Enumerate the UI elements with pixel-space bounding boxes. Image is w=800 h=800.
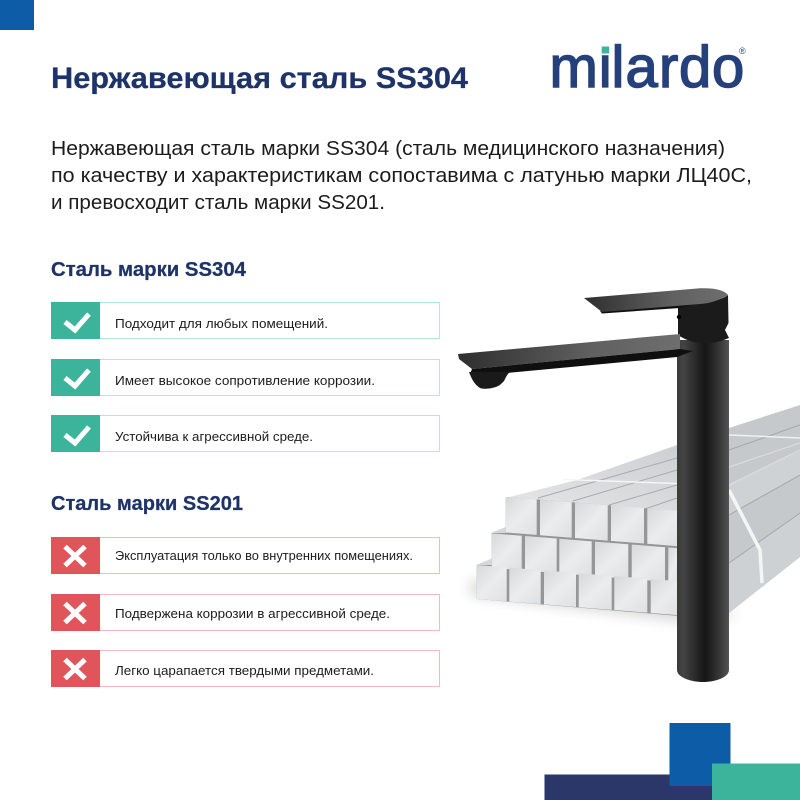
faucet aerator bbox=[469, 372, 510, 389]
heading: SS304: Сталь марки SS304 bbox=[51, 259, 247, 281]
row: corrosion resistance: Имеет высокое сопротивление коррозии. bbox=[115, 373, 375, 388]
top face bbox=[506, 445, 677, 512]
logo: milardo: ® bbox=[739, 46, 746, 56]
row: prone to corrosion bbox=[51, 594, 440, 631]
strap on side bbox=[729, 490, 762, 583]
row: aggressive environment bbox=[51, 415, 440, 452]
row: indoor only bbox=[51, 537, 440, 574]
faucet handle bbox=[584, 288, 728, 319]
middle row cells bbox=[492, 533, 680, 583]
panel: SS201 drawbacks bbox=[51, 537, 440, 687]
row: prone to corrosion: Подвержена коррозии в агрессивной среде. bbox=[115, 606, 390, 621]
bottom row cells bbox=[477, 565, 680, 615]
title: Нержавеющая сталь SS304 bbox=[51, 62, 468, 95]
row: aggressive environment: Устойчива к агрессивной среде. bbox=[115, 429, 313, 444]
intro text block bbox=[51, 137, 752, 214]
intro text block: и превосходит сталь марки SS201. bbox=[51, 191, 385, 214]
row: scratches easily bbox=[51, 650, 440, 687]
row: any rooms: Подходит для любых помещений. bbox=[115, 316, 328, 331]
decorative blocks: bottom right bbox=[544, 723, 800, 800]
intro text block: Нержавеющая сталь марки SS304 (сталь медицинского назначения) bbox=[51, 137, 725, 160]
panel: SS304 advantages bbox=[51, 302, 440, 452]
illustration: black faucet bbox=[458, 288, 729, 682]
corner square: top left bbox=[0, 0, 34, 30]
side of the stack bbox=[677, 405, 800, 616]
faucet body bbox=[677, 340, 729, 682]
faucet head bbox=[678, 295, 729, 344]
top row cells bbox=[506, 497, 680, 546]
intro text block: по качеству и характеристикам сопоставима с латунью марки ЛЦ40С, bbox=[51, 164, 752, 187]
gap backing bbox=[477, 497, 680, 616]
heading: SS201: Сталь марки SS201 bbox=[51, 493, 243, 515]
row: any rooms bbox=[51, 302, 440, 339]
row: corrosion resistance bbox=[51, 359, 440, 396]
illustration: stacked steel bars bbox=[470, 405, 800, 622]
row: scratches easily: Легко царапается твердыми предметами. bbox=[115, 663, 374, 678]
row: indoor only: Эксплуатация только во внутренних помещениях. bbox=[115, 548, 413, 563]
lower row ledges bbox=[491, 527, 680, 552]
faucet spout bbox=[458, 334, 693, 374]
logo: milardo: milardo bbox=[550, 35, 744, 100]
